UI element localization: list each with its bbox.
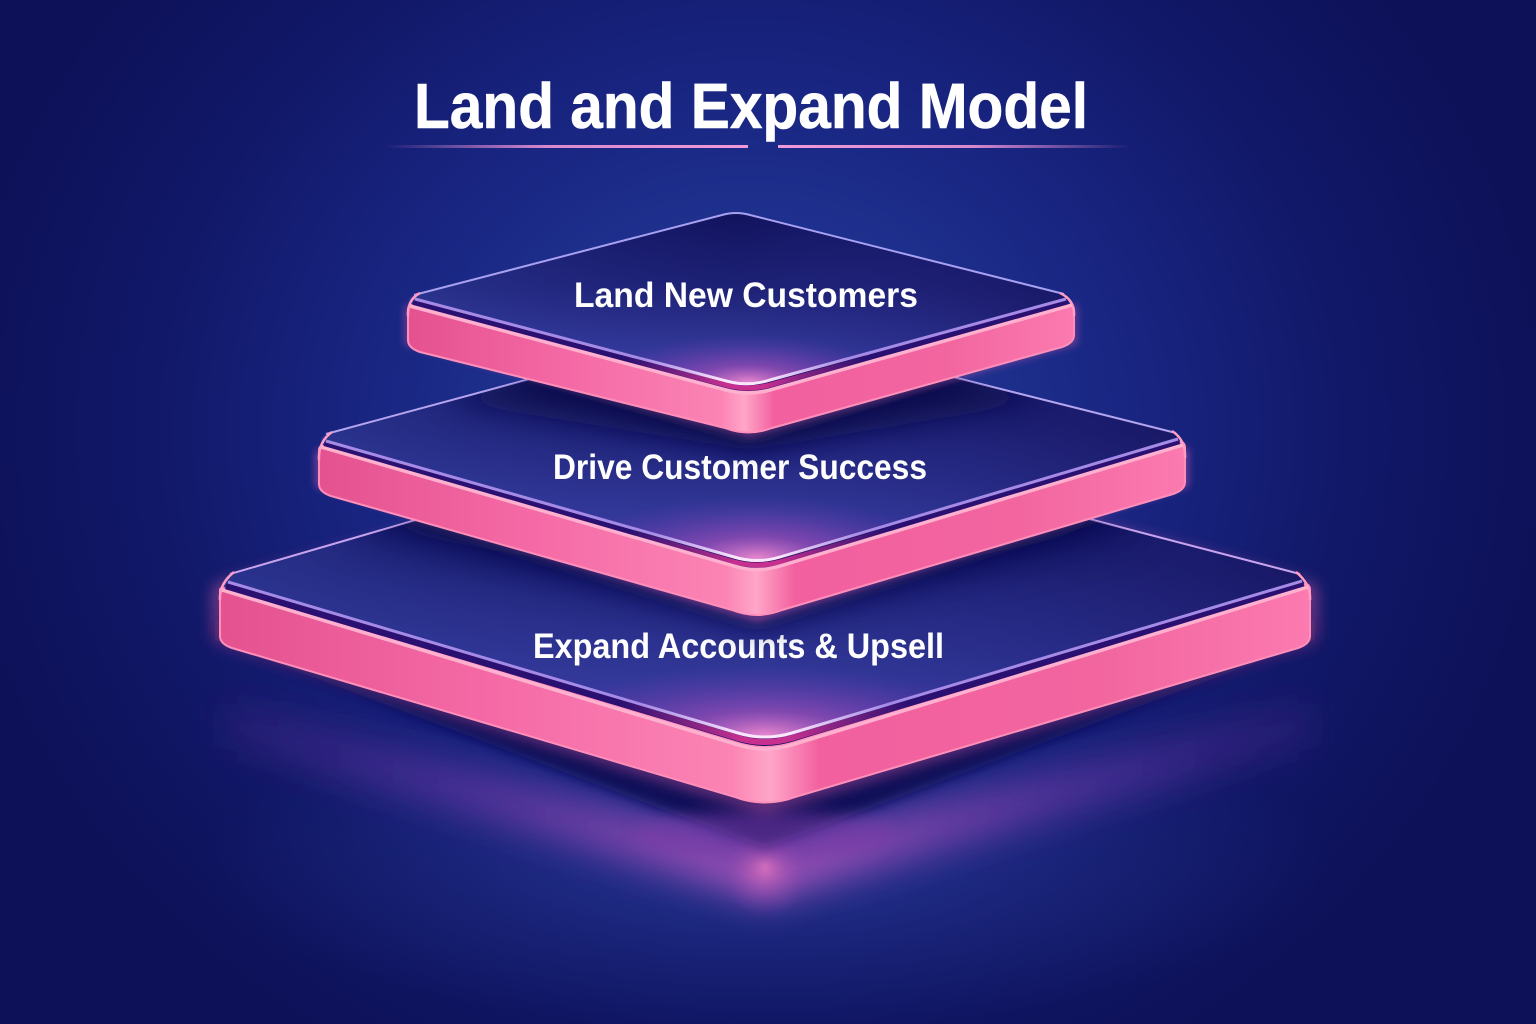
- tier 2 top highlight: [321, 445, 1183, 570]
- glow around tier 1: [408, 305, 1074, 434]
- tier 1 side wall: [408, 305, 1074, 432]
- tier 1: Land New Customers: [408, 213, 1074, 446]
- tier 1 top highlight: [410, 305, 1072, 393]
- tier 3 top face: [223, 507, 1306, 736]
- glow around tier 3: [220, 440, 1310, 805]
- shadow on tier 3: [372, 520, 1136, 650]
- title underline right: [778, 145, 1130, 148]
- title: Land and Expand Model: [414, 70, 1088, 142]
- tier 3 top highlight: [222, 587, 1308, 749]
- tier 3 corner rims: [220, 572, 1310, 600]
- tier 1 corner rims: [408, 293, 1074, 316]
- tier 1 top face: [409, 212, 1070, 382]
- floor reflection glow: [205, 620, 1325, 1024]
- shadow on tier 2: [490, 355, 999, 464]
- tier 3 label: Expand Accounts & Upsell: [533, 627, 944, 666]
- tier 2 side wall: [319, 442, 1185, 615]
- glow around tier 2: [319, 448, 1185, 618]
- title underline left: [385, 145, 748, 148]
- tier 2: Drive Customer Success: [319, 310, 1185, 632]
- tier 2 top face: [321, 354, 1181, 559]
- tier 3 groove: [226, 585, 1304, 742]
- tier 1 label: Land New Customers: [574, 276, 918, 315]
- shadow under bottom tier: [215, 620, 1315, 848]
- tier 2 label: Drive Customer Success: [553, 448, 927, 487]
- tier 2 groove: [324, 443, 1180, 566]
- tier 3: Expand Accounts & Upsell: [203, 494, 1327, 820]
- tier 2 corner rims: [319, 431, 1185, 460]
- tier 3 side wall: [220, 584, 1310, 802]
- tier 1 groove: [413, 303, 1068, 388]
